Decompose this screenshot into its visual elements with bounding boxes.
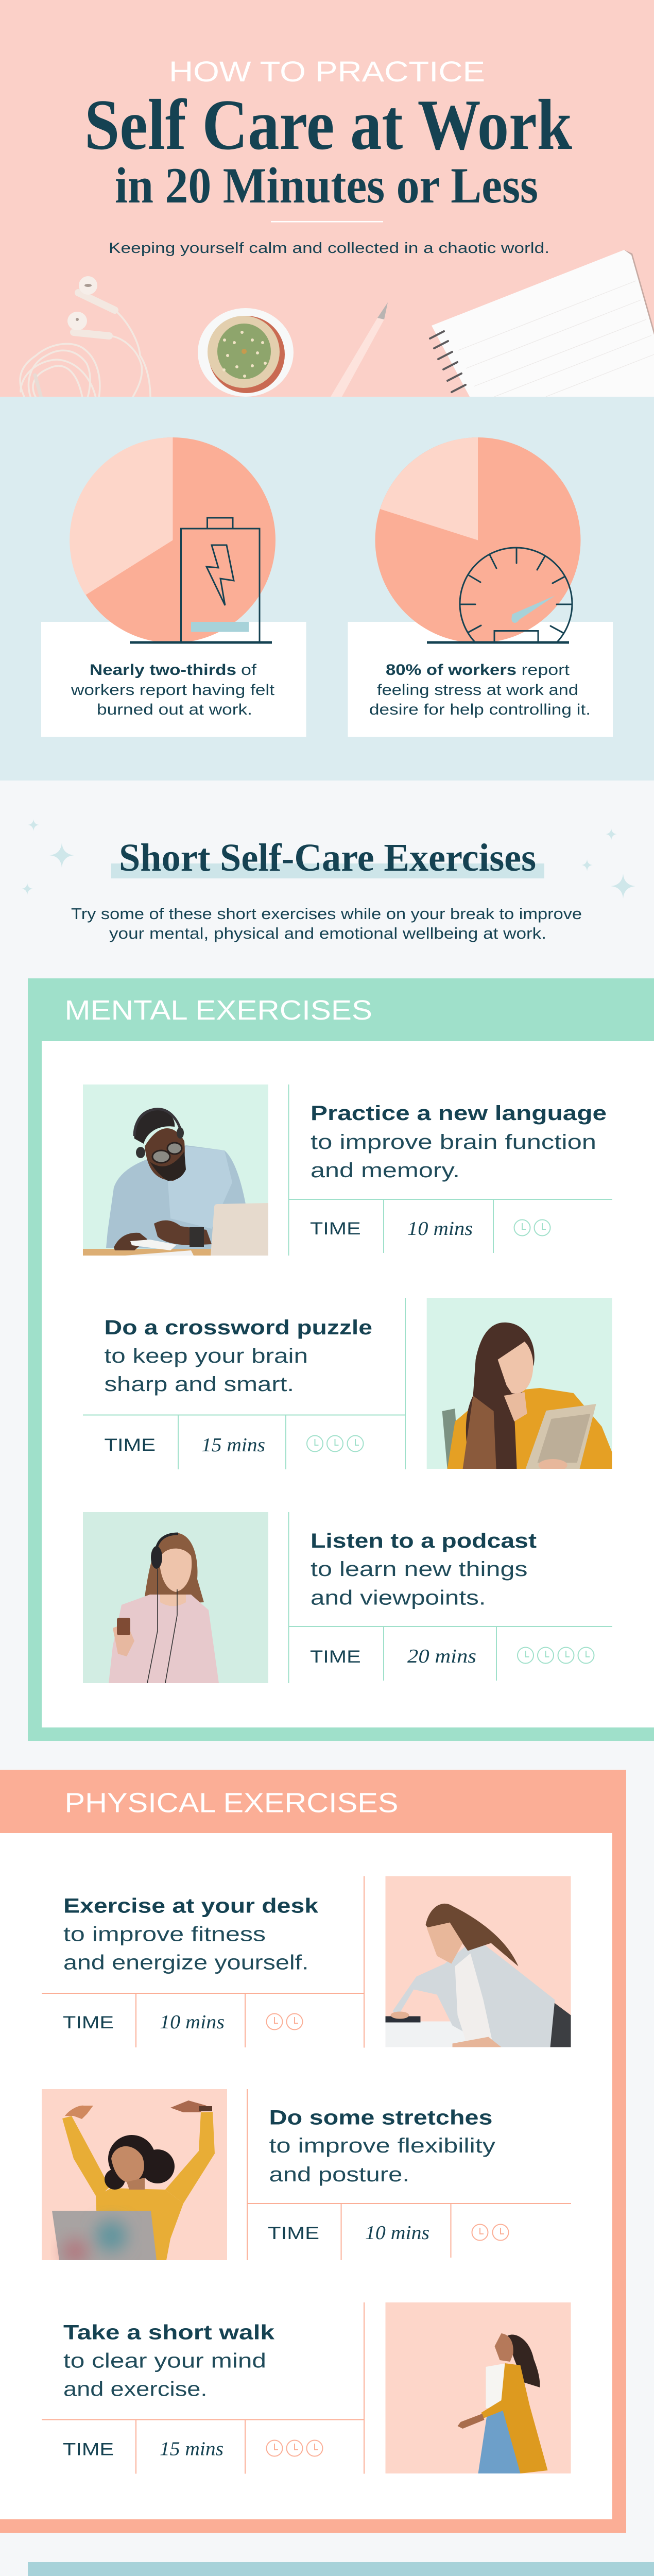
exercise: exercise at your desk [42,1876,571,2047]
exercise text [311,1102,607,1182]
panel: header [0,0,654,398]
exercise text: and exercise. [63,2378,207,2401]
exercise text: and posture. [269,2163,409,2186]
pie chart: 80 percent [375,437,581,643]
heading: MENTAL EXERCISES [65,995,372,1026]
stat text: 80% of workers [386,662,517,679]
time row: TIME [104,1435,156,1455]
photo: woman listening on headphones [83,1512,268,1683]
time row: 15 mins [201,1434,265,1456]
stat text: desire for help controlling it. [369,701,591,718]
exercise text: to learn new things [311,1558,527,1581]
intro text [71,905,582,942]
heading: PHYSICAL EXERCISES [65,1788,399,1819]
photo: earphones [20,276,150,398]
icon: clocks [267,2440,322,2456]
photo: spiral notebook [430,250,654,397]
icon: stress gauge [427,548,572,642]
icon: clocks [307,1435,364,1452]
stat text: feeling stress at work and [377,682,578,699]
time row [83,1415,405,1469]
stat text [369,662,591,718]
icon: clocks [267,2013,303,2030]
stat text [71,662,275,718]
stat text: burned out at work. [97,701,252,718]
exercise text: Practice a new language [311,1102,607,1125]
photo: woman doing desk push-ups [385,1876,571,2047]
exercise text: and energize yourself. [63,1952,309,1974]
sparkles decoration [22,819,635,899]
exercise text [269,2106,495,2186]
time row: TIME [310,1219,361,1239]
time row [288,1199,612,1253]
exercise text: to improve fitness [63,1923,266,1945]
subtitle: Keeping yourself calm and collected in a chaotic world. [109,240,549,257]
time row [42,2419,364,2474]
time row: TIME [268,2224,319,2243]
title line 2: in 20 Minutes or Less [115,158,538,214]
title line 1: Self Care at Work [84,85,572,165]
exercise text: and memory. [311,1159,460,1182]
intro text: your mental, physical and emotional wellbeing at work. [109,924,546,942]
photo: woman reading newspaper [427,1298,612,1471]
stat text: report [521,662,570,679]
exercise: do some stretches [42,2089,571,2264]
heading: Short Self-Care Exercises [119,836,536,879]
icon: clocks [472,2225,509,2240]
photo: woman stretching at laptop [42,2089,227,2264]
exercise text [63,2321,275,2401]
panel: emotional exercises [28,2562,654,2576]
stat card: burned out [41,437,306,737]
exercise text: Do some stretches [269,2106,492,2129]
stat text: Nearly two-thirds [90,662,236,679]
exercise text: to improve brain function [311,1131,596,1154]
exercise: listen to a podcast [83,1512,612,1683]
section intro: short exercises [22,819,635,942]
exercise text: sharp and smart. [104,1373,294,1396]
stat text: workers report having felt [71,682,275,699]
exercise text: Listen to a podcast [311,1530,537,1552]
icon: low battery [130,518,272,642]
time row: 10 mins [160,2011,225,2033]
time row [42,1993,364,2047]
time row: 10 mins [365,2222,429,2244]
stat text: of [241,662,257,679]
exercise text [104,1316,372,1396]
panel: mental exercises [28,978,654,1741]
exercise text: to keep your brain [104,1345,308,1367]
eyebrow heading: HOW TO PRACTICE [169,55,485,88]
time row: 10 mins [407,1218,473,1240]
exercise: take a short walk [42,2302,571,2474]
exercise text: Do a crossword puzzle [104,1316,372,1339]
time row [288,1626,612,1681]
time row: TIME [63,2013,114,2032]
exercise text [63,1895,319,1974]
photo: cactus in pot [198,308,294,397]
panel: physical exercises [0,1770,626,2533]
icon: clocks [514,1220,550,1235]
exercise text: to improve flexibility [269,2134,495,2157]
time row: TIME [310,1647,361,1667]
time row: TIME [63,2440,114,2460]
exercise text: Exercise at your desk [63,1895,319,1918]
time row: 15 mins [160,2438,223,2460]
photo: man with headphones writing [83,1084,268,1256]
exercise: practice a new language [83,1084,612,1256]
exercise: crossword puzzle [83,1298,612,1471]
time row: 20 mins [407,1646,476,1667]
pie chart: two-thirds [70,437,276,643]
icon: clocks [518,1648,594,1663]
panel: statistics [0,397,654,781]
intro text: Try some of these short exercises while on your break to improve [71,905,582,923]
photo: woman walking [385,2302,571,2473]
exercise text: to clear your mind [63,2349,266,2372]
time row [247,2204,571,2260]
exercise text [311,1530,537,1609]
stat card: stress [348,437,613,737]
photo: pen [331,302,388,397]
exercise text: and viewpoints. [311,1587,486,1609]
exercise text: Take a short walk [63,2321,275,2344]
